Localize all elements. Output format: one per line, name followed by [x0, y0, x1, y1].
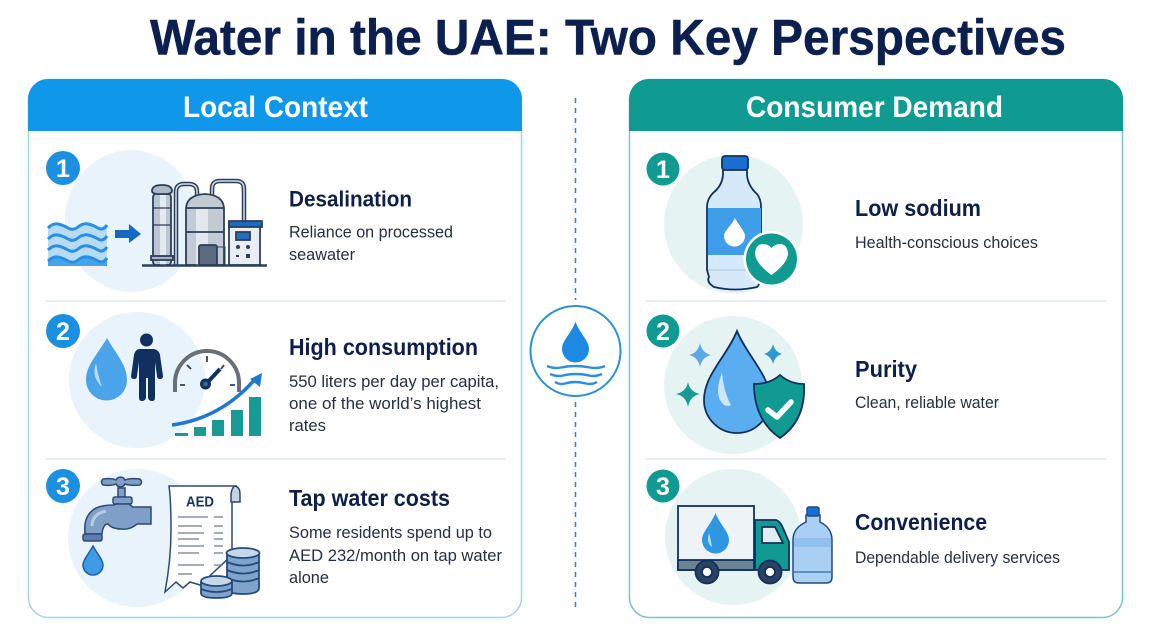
- panel header: consumer demand: [629, 79, 1123, 131]
- icon: heart badge: [744, 231, 800, 287]
- badge 3: [646, 470, 680, 502]
- text: tap water costs: [289, 485, 502, 587]
- icon: gauge: [175, 351, 239, 392]
- text: high consumption: [289, 334, 499, 435]
- text: desalination: seawater: [289, 245, 355, 264]
- text: high consumption: High consumption: [289, 334, 478, 360]
- panel: consumer demand: [629, 79, 1123, 618]
- text: convenience: Dependable delivery services: [855, 549, 1060, 567]
- icon: receipt with AED: [165, 486, 240, 592]
- text: tap water costs: Tap water costs: [289, 485, 450, 511]
- text: tap water costs: AED 232/month on tap water: [289, 546, 502, 565]
- icon: sparkles: [676, 343, 782, 407]
- panel: local context: [28, 79, 522, 618]
- icon: centre water emblem: [530, 306, 620, 396]
- badge 3: 3: [656, 473, 670, 501]
- icon: check shield: [754, 375, 804, 438]
- text: low sodium: Health-conscious choices: [855, 234, 1038, 252]
- text: purity: Purity: [855, 356, 917, 382]
- icon: receipt with AED: AED: [186, 494, 214, 510]
- panel header: local context: [28, 79, 522, 131]
- centre divider: [574, 98, 576, 612]
- icon: water jug: [793, 507, 832, 583]
- text: high consumption: 550 liters per day per capita,: [289, 372, 499, 391]
- icon: water bottle: [707, 156, 761, 290]
- item 3: tap water costs: [46, 469, 260, 607]
- badge 1: [646, 152, 680, 186]
- badge 2: [46, 314, 80, 348]
- badge 1: 1: [56, 155, 70, 183]
- text: high consumption: rates: [289, 416, 326, 435]
- icon: coins: [201, 548, 260, 598]
- item 3: convenience: [646, 469, 832, 605]
- item 2: high consumption: [46, 312, 262, 448]
- badge 2: 2: [56, 318, 70, 346]
- badge 3: 3: [56, 473, 70, 501]
- text: tap water costs: Some residents spend up to: [289, 523, 492, 542]
- badge 3: [46, 469, 80, 503]
- text: desalination: [289, 186, 453, 264]
- panel header: consumer demand: Consumer Demand: [746, 91, 1003, 124]
- item 1: low sodium: [646, 152, 803, 294]
- text: purity: [855, 356, 999, 412]
- text: tap water costs: alone: [289, 568, 329, 587]
- badge 2: 2: [656, 318, 670, 346]
- icon: person: [131, 334, 163, 401]
- item 1: desalination: [46, 150, 267, 292]
- text: desalination: Desalination: [289, 186, 412, 212]
- item 2: purity: [646, 314, 804, 454]
- icon: water drop: [86, 338, 127, 400]
- text: convenience: [855, 509, 1060, 567]
- text: purity: Clean, reliable water: [855, 394, 999, 412]
- icon: large drop: [704, 331, 770, 433]
- icon: faucet: [83, 477, 151, 541]
- icon: rising bar chart: [172, 373, 262, 436]
- badge 1: [46, 151, 80, 185]
- icon: sea waves: [48, 224, 107, 266]
- icon: desalination plant: [142, 181, 267, 266]
- badge 2: [646, 314, 680, 348]
- text: low sodium: [855, 195, 1038, 252]
- badge 1: 1: [656, 156, 670, 184]
- icon: delivery truck: [678, 506, 789, 584]
- text: convenience: Convenience: [855, 509, 987, 535]
- text: desalination: Reliance on processed: [289, 222, 453, 242]
- text: low sodium: Low sodium: [855, 195, 981, 221]
- title: Water in the UAE: Two Key Perspectives: [150, 10, 1066, 66]
- icon: small drop: [83, 546, 103, 575]
- panel header: local context: Local Context: [183, 91, 368, 124]
- icon: arrow: [115, 224, 141, 243]
- text: high consumption: one of the world’s highest: [289, 394, 481, 413]
